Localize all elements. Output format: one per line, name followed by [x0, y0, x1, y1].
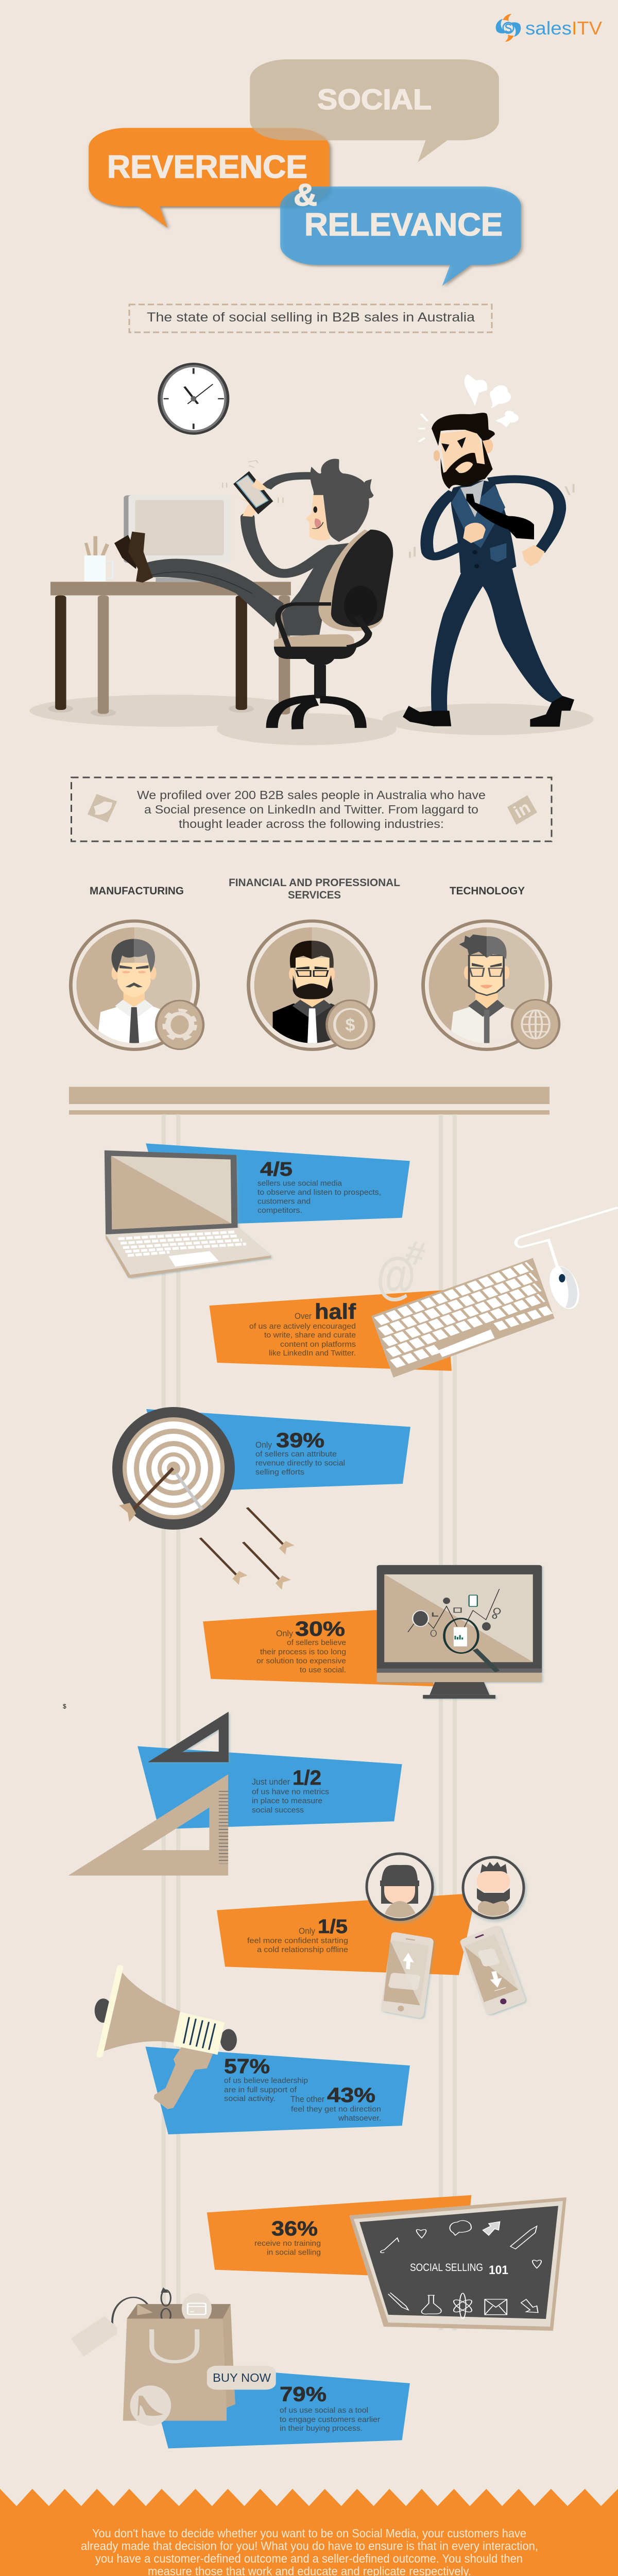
icon: avatar man	[463, 1857, 524, 1918]
copy line: customers and	[258, 1197, 311, 1206]
figure: 1/5	[318, 1916, 348, 1938]
icon: target	[112, 1407, 235, 1530]
ribbon: blue	[138, 1746, 402, 1829]
heading: manufacturing: MANUFACTURING	[90, 885, 184, 897]
dashed frame	[71, 777, 552, 841]
copy line: in their buying process.	[280, 2425, 363, 2433]
heading: technology: TECHNOLOGY	[450, 885, 525, 897]
lead word: Only	[276, 1629, 293, 1638]
icon: laptop	[105, 1150, 271, 1278]
portrait: financial	[247, 920, 377, 1051]
figure: half	[315, 1299, 356, 1324]
floor shadows	[29, 694, 594, 745]
stat 7 text	[224, 2055, 381, 2123]
office chair	[272, 530, 393, 729]
copy line: receive no training	[254, 2240, 321, 2248]
icon: loose arrows	[200, 1507, 295, 1590]
heading: financial and professional services	[229, 877, 400, 901]
figure: 39%	[276, 1429, 324, 1452]
stat 9 text	[280, 2383, 380, 2433]
heading: financial and professional services: SERVICES	[288, 889, 341, 901]
button label: BUY NOW	[213, 2371, 271, 2384]
stat 6, 7, 8 artwork	[95, 1893, 525, 2293]
icon: twitter	[88, 794, 117, 822]
ribbon: orange	[203, 1606, 434, 1686]
copy line: whatsoever.	[338, 2114, 381, 2123]
copy line: of us are actively encouraged	[249, 1323, 356, 1331]
stat 1 text	[258, 1159, 381, 1215]
wordmark accent: ITV	[572, 18, 602, 39]
conclusion line 1: You don't have to decide whether you want to be on Social Media, your customers have	[92, 2527, 526, 2540]
lead word: Over	[295, 1311, 312, 1321]
chalk doodles lower	[388, 2293, 538, 2319]
stat 2: keyboard	[209, 1208, 618, 1378]
button: buy now	[207, 2366, 276, 2389]
icon: desktop monitor	[377, 1565, 542, 1699]
copy line: feel more confident starting	[247, 1937, 348, 1945]
copy line: sellers use social media	[258, 1180, 342, 1188]
icon: shopping bag	[71, 2290, 235, 2426]
ribbon: orange	[207, 2195, 471, 2279]
icon: linkedin	[507, 795, 537, 825]
ribbon: blue	[145, 2362, 410, 2448]
copy line: feel they get no direction	[291, 2105, 381, 2113]
stray glyph: $	[63, 1703, 66, 1710]
lead word: Just under	[252, 1777, 290, 1787]
portrait: technology	[421, 920, 559, 1051]
angry boss	[403, 375, 574, 727]
title ampersand: &	[294, 178, 317, 212]
copy line: to engage customers earlier	[280, 2416, 380, 2424]
figure: 36%	[271, 2217, 318, 2240]
icon: phone two	[460, 1926, 525, 2014]
figure: 1/2	[293, 1767, 321, 1789]
figure: 57%	[224, 2055, 270, 2078]
seated man	[114, 459, 374, 636]
laptop on desk	[124, 495, 231, 582]
icon: phone one	[381, 1932, 434, 2018]
copy line: to use social.	[300, 1666, 346, 1674]
conclusion line 2: already made that decision for you! What you do have to ensure is that in every interaction,	[81, 2539, 538, 2552]
bubble: relevance	[280, 187, 521, 286]
scene: office illustration	[29, 363, 594, 745]
stat 4 text	[256, 1618, 346, 1674]
figure: 43%	[327, 2084, 375, 2107]
stat 3 text	[255, 1429, 345, 1477]
figure: 4/5	[260, 1159, 293, 1180]
copy line: of sellers can attribute	[255, 1450, 337, 1459]
copy line: their process is too long	[260, 1648, 346, 1656]
stat 1: laptop	[105, 1143, 410, 1278]
icon: avatar woman	[367, 1854, 433, 1920]
icon: keyboard	[371, 1258, 555, 1378]
dashed frame	[129, 304, 492, 332]
intro text line 2: a Social presence on LinkedIn and Twitter. From laggard to	[144, 803, 478, 816]
icon: at sign: @	[376, 1247, 416, 1304]
copy line: of sellers believe	[287, 1639, 346, 1647]
icon: hash sign: #	[402, 1232, 428, 1274]
title speech bubbles	[89, 59, 521, 286]
figure: 79%	[280, 2383, 327, 2406]
stat 9 artwork	[71, 2290, 410, 2448]
copy line: selling efforts	[255, 1468, 304, 1477]
logo: salesITV header	[496, 14, 602, 42]
lead words: The other	[290, 2094, 324, 2104]
copy line: revenue directly to social	[255, 1459, 345, 1467]
outer frame	[349, 2197, 566, 2331]
icon: dark set square	[148, 1711, 229, 1762]
ribbon: blue	[146, 1143, 410, 1226]
icon: tan set square	[68, 1774, 228, 1875]
zigzag panel	[0, 2489, 618, 2576]
copy line: of us use social as a tool	[280, 2406, 368, 2415]
icon: megaphone	[95, 1967, 237, 2109]
copy line: content on platforms	[280, 1341, 356, 1349]
copy line: in social selling	[267, 2248, 321, 2257]
icon: blackboard	[349, 2197, 566, 2331]
chalk doodles upper	[381, 2221, 541, 2268]
copy line: like LinkedIn and Twitter.	[269, 1349, 356, 1358]
stat 2 text	[249, 1299, 356, 1358]
copy line: are in full support of	[224, 2086, 297, 2094]
icon: salesITV swirl	[496, 14, 521, 42]
timeline poles	[162, 1114, 457, 2330]
stat 5 text	[252, 1767, 329, 1815]
subtitle box	[129, 304, 492, 332]
divider band lower	[69, 1110, 550, 1115]
intro text line 3: thought leader across the following industries:	[179, 817, 444, 831]
portraits row	[69, 920, 559, 1051]
icon: linkedin: in	[510, 798, 534, 822]
title text	[107, 83, 503, 243]
heading: financial and professional services: FINANCIAL AND PROFESSIONAL	[229, 877, 400, 889]
figure: 30%	[295, 1618, 345, 1640]
footer: orange conclusion	[0, 2489, 618, 2576]
stat 4 and 5 artwork	[68, 1507, 542, 1875]
copy line: or solution too expensive	[256, 1657, 346, 1665]
copy line: to observe and listen to prospects,	[258, 1189, 381, 1197]
icon: small glasses tip	[161, 2287, 169, 2293]
bubble: reverence	[89, 128, 330, 228]
wordmark: sales	[525, 18, 572, 39]
stat 8 text	[254, 2217, 321, 2257]
ribbon: orange	[217, 1893, 476, 1975]
chalk number: 101	[489, 2263, 508, 2277]
chalk text: SOCIAL SELLING	[410, 2262, 483, 2274]
divider band	[69, 1087, 550, 1104]
bubble: social	[250, 59, 499, 162]
copy line: social activity.	[224, 2095, 276, 2103]
copy line: of us have no metrics	[252, 1788, 329, 1796]
copy line: competitors.	[258, 1207, 302, 1215]
subtitle text: The state of social selling in B2B sales in Australia	[147, 310, 475, 325]
desk	[50, 582, 291, 715]
copy line: a cold relationship offline	[257, 1946, 348, 1954]
conclusion line 3: you have a customer-defined outcome and a seller-defined outcome. You should then	[95, 2552, 523, 2565]
intro text line 1: We profiled over 200 B2B sales people in Australia who have	[137, 788, 486, 802]
dollar sign on badge: $	[346, 1015, 355, 1035]
portrait: manufacturing	[69, 920, 203, 1051]
ribbon: blue	[145, 2046, 410, 2134]
inner frame	[354, 2201, 563, 2327]
title word: relevance: RELEVANCE	[304, 207, 503, 243]
title word: reverence: REVERENCE	[107, 149, 307, 185]
copy line: in place to measure	[252, 1797, 322, 1805]
ribbon: orange	[209, 1290, 452, 1371]
board surface	[359, 2206, 558, 2319]
stat 6 text	[247, 1916, 348, 1954]
icon: mouse	[516, 1208, 618, 1311]
intro panel	[71, 777, 552, 841]
copy line: to write, share and curate	[264, 1331, 356, 1340]
lead word: Only	[255, 1440, 272, 1450]
stat 3 ribbon: blue	[146, 1409, 410, 1492]
icon: wall clock	[158, 363, 229, 435]
copy line: of us believe leadership	[224, 2077, 308, 2085]
lead word: Only	[299, 1926, 315, 1936]
mug with pencils	[84, 536, 113, 581]
title word: social: SOCIAL	[317, 83, 432, 115]
copy line: social success	[252, 1806, 304, 1815]
